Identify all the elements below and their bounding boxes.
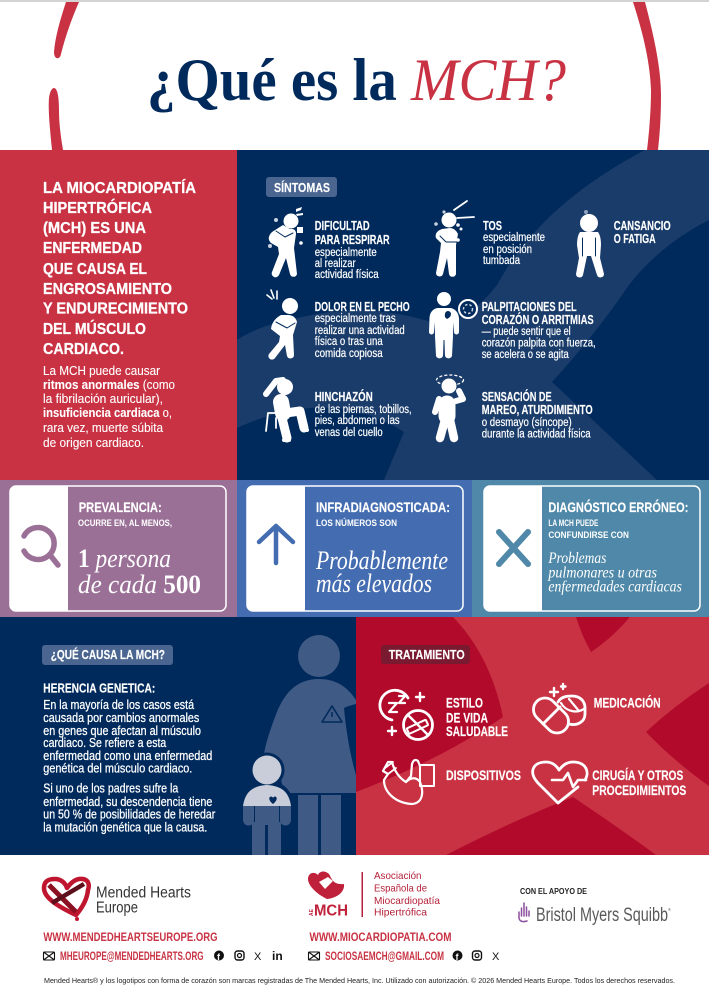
text: cough: tumbada xyxy=(483,255,520,267)
causes paragraph 2: enfermedad, su descendencia tiene xyxy=(43,795,212,809)
logo: AEMCH: AE xyxy=(309,908,315,916)
definition heading: CARDIACO. xyxy=(43,341,124,358)
definition heading: QUE CAUSA EL xyxy=(43,261,147,278)
text: chest pain xyxy=(315,300,410,360)
text: medication: MEDICACIÓN xyxy=(594,696,661,711)
definition heading: ENGROSAMIENTO xyxy=(43,281,172,298)
text: fatigue xyxy=(614,219,671,246)
causes paragraph 2: la mutación genética que la causa. xyxy=(43,820,207,834)
definition heading: DEL MÚSCULO xyxy=(43,319,146,338)
text: healthy lifestyle: DE VIDA xyxy=(446,710,488,725)
panel: misdiagnosis xyxy=(472,480,709,617)
icon: devices xyxy=(383,760,434,804)
sponsor label: CON EL APOYO DE xyxy=(520,887,588,896)
logo: Bristol Myers Squibb xyxy=(519,903,671,926)
causes paragraph 1: genética del músculo cardiaco. xyxy=(43,762,192,776)
definition heading: Y ENDURECIMIENTO xyxy=(43,300,188,318)
text: swelling: de las piernas, tobillos, xyxy=(315,404,412,416)
text: healthy lifestyle: ESTILO xyxy=(446,696,483,711)
text: dizziness: MAREO, ATURDIMIENTO xyxy=(482,403,593,417)
treatment badge xyxy=(381,645,470,664)
misdiagnosis statement: enfermedades cardiacas xyxy=(548,578,682,595)
text: fatigue: O FATIGA xyxy=(614,232,656,246)
definition heading: ENFERMEDAD xyxy=(43,240,142,257)
symptoms badge xyxy=(266,177,337,197)
prevalence subheading: OCURRE EN, AL MENOS, xyxy=(78,518,172,529)
text: palpitations: — puede sentir que el xyxy=(482,326,571,338)
text: chest pain: DOLOR EN EL PECHO xyxy=(315,300,410,314)
text: breathing difficulty: DIFICULTAD xyxy=(315,219,370,233)
text: palpitations: PALPITACIONES DEL xyxy=(482,300,577,314)
header band with title xyxy=(49,2,661,150)
definition heading: (MCH) ES UNA xyxy=(43,220,146,237)
icon: chest pain xyxy=(267,290,298,360)
panel: definition xyxy=(0,150,237,480)
social icons: AEMCH: X xyxy=(492,951,500,963)
text: swelling: pies, abdomen o las xyxy=(315,415,400,427)
definition body text: La MCH puede causar xyxy=(43,364,160,378)
causes subheading: HERENCIA GENETICA: xyxy=(43,682,155,696)
panel: prevalence xyxy=(0,480,237,617)
logo: AEMCH: Española de xyxy=(374,883,427,895)
text: dizziness: SENSACIÓN DE xyxy=(482,389,552,404)
icon: cross xyxy=(499,532,528,564)
text: cough xyxy=(483,219,545,267)
text: breathing difficulty: actividad física xyxy=(315,269,379,281)
social icons: Mended Hearts: in xyxy=(272,949,283,963)
icon: up arrow xyxy=(259,526,293,563)
misdiagnosis statement xyxy=(547,550,682,595)
icon: heart with pulse xyxy=(533,762,587,803)
text: chest pain: especialmente tras xyxy=(315,313,396,325)
definition heading: LA MIOCARDIOPATÍA xyxy=(43,178,196,197)
definition heading: HIPERTRÓFICA xyxy=(43,198,152,217)
text: breathing difficulty: especialmente xyxy=(315,247,377,259)
icon: cough xyxy=(434,201,474,277)
logo: AEMCH: Hipertrófica xyxy=(374,907,427,919)
text: breathing difficulty: PARA RESPIRAR xyxy=(315,233,390,247)
causes paragraph 2 xyxy=(43,782,215,834)
definition heading xyxy=(43,178,196,358)
icon: fatigue xyxy=(576,210,604,277)
misdiagnosis subheading xyxy=(548,518,629,541)
text: palpitations: corazón palpita con fuerza, xyxy=(482,338,596,350)
text: dizziness: durante la actividad física xyxy=(482,428,591,440)
text: devices: DISPOSITIVOS xyxy=(446,768,521,783)
AEMCH email: SOCIOSAEMCH@GMAIL.COM xyxy=(325,949,444,963)
panel: symptoms xyxy=(237,150,709,480)
treatment badge: TRATAMIENTO xyxy=(389,648,465,662)
social icons: Mended Hearts: X xyxy=(254,951,262,963)
logo: Mended Hearts Europe: Europe xyxy=(96,900,138,917)
text: dizziness xyxy=(482,389,593,440)
social icons: Mended Hearts: f xyxy=(217,952,221,962)
causes paragraph 2: Si uno de los padres sufre la xyxy=(43,782,178,796)
social icons: AEMCH: f xyxy=(456,952,460,962)
prevalence statistic: 1 persona xyxy=(78,544,171,573)
title: ¿Qué es la MCH? xyxy=(147,47,566,113)
causes paragraph 1: enfermedad como una enfermedad xyxy=(43,749,212,763)
misdiagnosis statement: pulmonares u otras xyxy=(547,564,657,581)
panel: underdiagnosed xyxy=(237,480,472,617)
logo: AEMCH: Asociación xyxy=(374,870,422,882)
footer xyxy=(43,870,675,985)
text: fatigue: CANSANCIO xyxy=(614,219,671,233)
misdiagnosis subheading: CONFUNDIRSE CON xyxy=(548,530,629,541)
text: chest pain: realizar una actividad xyxy=(315,325,405,337)
text: palpitations: CORAZÓN O ARRITMIAS xyxy=(482,312,594,327)
icon: magnifier xyxy=(24,528,58,565)
legal notice: Mended Hearts® y los logotipos con forma de corazón son marcas registradas de The Mended Hearts, Inc. Utilizado con autorización. © 2026 Mended Hearts Europe. Todos los derechos reservados. xyxy=(44,977,675,985)
icon: medication xyxy=(529,684,585,738)
prevalence statistic: de cada 500 xyxy=(78,570,201,599)
text: swelling xyxy=(315,389,412,439)
icon: healthy lifestyle xyxy=(380,690,432,740)
AEMCH website: WWW.MIOCARDIOPATIA.COM xyxy=(310,930,452,944)
panel: treatment xyxy=(356,617,709,855)
icon: dizziness xyxy=(435,375,464,438)
text: dizziness: o desmayo (síncope) xyxy=(482,417,572,429)
causes paragraph 1: cardiaco. Se refiere a esta xyxy=(43,736,166,750)
icon: breathing difficulty xyxy=(268,207,303,277)
prevalence heading: PREVALENCIA: xyxy=(79,499,162,515)
panel: causes xyxy=(0,617,356,855)
logo: Mended Hearts Europe xyxy=(44,879,191,921)
text: surgery xyxy=(592,768,686,798)
social icons: AEMCH xyxy=(452,950,500,963)
prevalence statistic xyxy=(78,544,201,599)
logo: Bristol Myers Squibb: ® xyxy=(668,907,671,912)
text: palpitations: se acelera o se agita xyxy=(482,349,569,361)
text: breathing difficulty xyxy=(315,219,390,281)
logo: Bristol Myers Squibb: Bristol Myers Squibb xyxy=(536,905,668,926)
decorative arcs xyxy=(49,2,661,150)
logo: AEMCH: MCH xyxy=(314,903,348,920)
definition body text: rara vez, muerte súbita xyxy=(43,421,163,435)
underdiagnosed heading: INFRADIAGNOSTICADA: xyxy=(316,499,450,515)
underdiagnosed subheading: LOS NÚMEROS SON xyxy=(316,517,397,529)
definition body text: de origen cardiaco. xyxy=(43,436,144,450)
definition body text: insuficiencia cardiaca o, xyxy=(43,406,172,420)
icon: palpitations xyxy=(429,292,477,358)
logo: Mended Hearts Europe: Mended Hearts xyxy=(96,885,191,902)
causes paragraph 1 xyxy=(43,698,212,776)
Mended Hearts email: MHEUROPE@MENDEDHEARTS.ORG xyxy=(60,949,204,963)
Mended Hearts website: WWW.MENDEDHEARTSEUROPE.ORG xyxy=(43,930,218,944)
causes paragraph 1: En la mayoría de los casos está xyxy=(43,698,194,712)
underdiagnosed statement: Probablemente xyxy=(315,546,448,575)
causes badge xyxy=(42,645,173,665)
underdiagnosed statement: más elevados xyxy=(316,569,432,598)
misdiagnosis subheading: LA MCH PUEDE xyxy=(548,518,598,529)
misdiagnosis statement: Problemas xyxy=(548,550,606,567)
text: cough: TOS xyxy=(483,219,502,233)
text: healthy lifestyle: SALUDABLE xyxy=(446,724,508,739)
causes paragraph 2: un 50 % de posibilidades de heredar xyxy=(43,808,215,822)
underdiagnosed statement xyxy=(315,546,448,598)
text: cough: especialmente xyxy=(483,232,545,244)
text: chest pain: física o tras una xyxy=(315,336,383,348)
icon: swelling xyxy=(266,379,307,440)
illustration: mother and child xyxy=(240,635,356,855)
causes badge: ¿QUÉ CAUSA LA MCH? xyxy=(51,647,165,662)
text: breathing difficulty: al realizar xyxy=(315,258,356,270)
definition body text: la fibrilación auricular), xyxy=(43,392,163,406)
text: swelling: venas del cuello xyxy=(315,427,383,439)
text: palpitations xyxy=(482,300,596,361)
text: swelling: HINCHAZÓN xyxy=(315,389,373,404)
text: chest pain: comida copiosa xyxy=(315,348,383,360)
text: healthy lifestyle xyxy=(446,696,508,739)
symptoms badge: SÍNTOMAS xyxy=(274,180,330,195)
icon: mail xyxy=(308,952,320,960)
definition body text xyxy=(43,364,175,450)
social icons: Mended Hearts xyxy=(214,949,283,963)
logo: AEMCH xyxy=(308,870,440,920)
causes paragraph 1: causada por cambios anormales xyxy=(43,711,199,725)
logo: AEMCH: Miocardiopatía xyxy=(374,895,440,907)
definition body text: ritmos anormales (como xyxy=(43,378,175,392)
causes paragraph 1: en genes que afectan al músculo xyxy=(43,724,201,738)
text: cough: en posición xyxy=(483,244,532,256)
icon: mail xyxy=(44,952,54,960)
